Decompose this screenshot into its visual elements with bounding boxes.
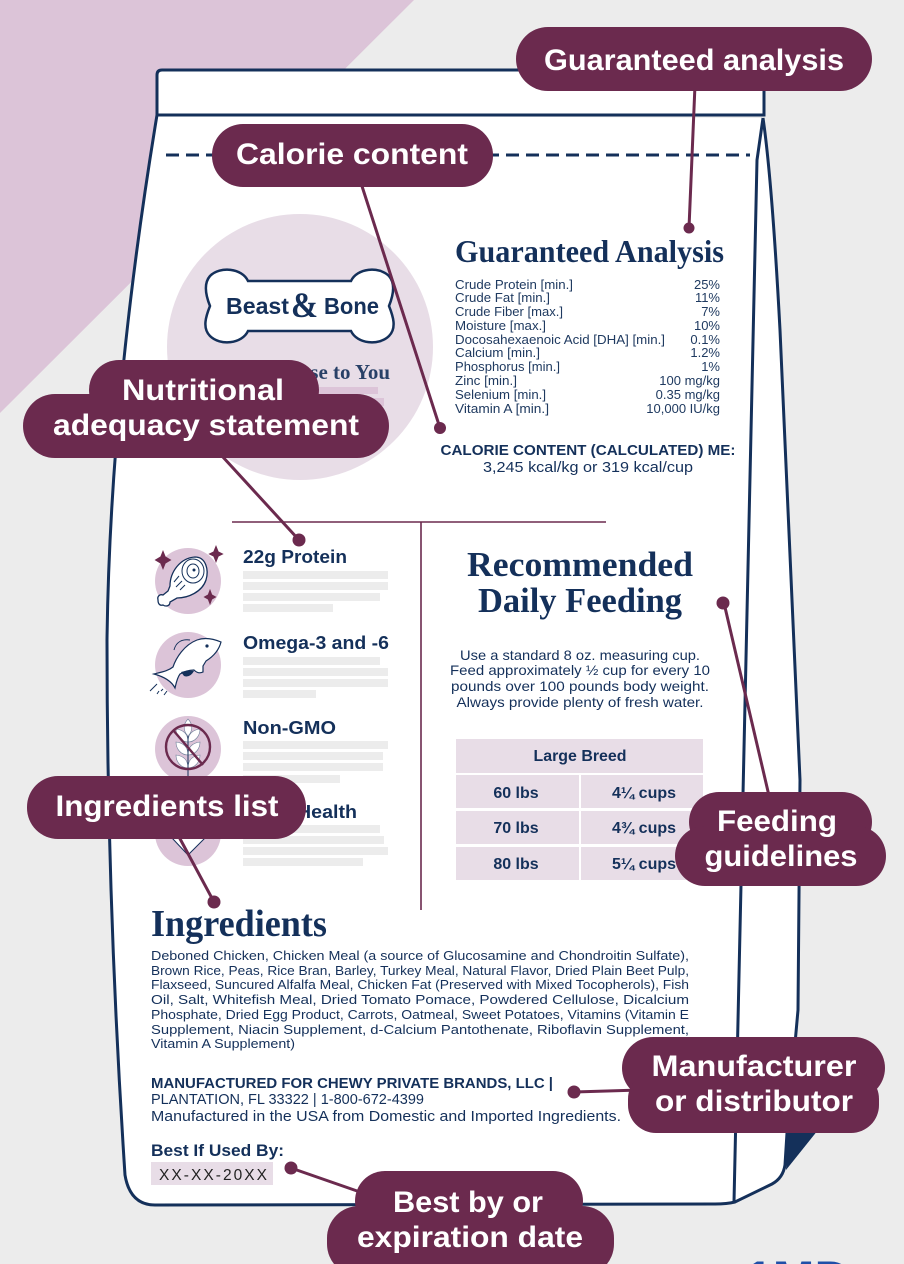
callout: manufacturer or distributor xyxy=(622,1037,885,1133)
icon: bone logo xyxy=(205,270,394,342)
callout: calorie content xyxy=(212,124,493,187)
benefit: health xyxy=(243,802,388,866)
callout: nutritional adequacy statement xyxy=(23,360,389,458)
feeding instructions: Use a standard 8 oz. measuring cup. xyxy=(460,647,700,663)
feeding instructions: Feed approximately ½ cup for every 10 xyxy=(450,662,710,678)
analysis table: Vitamin A [min.] xyxy=(455,401,549,416)
ingredients text xyxy=(151,948,689,1051)
benefit: protein xyxy=(243,547,388,612)
analysis table: 10% xyxy=(694,318,720,333)
analysis table: Docosahexaenoic Acid [DHA] [min.] xyxy=(455,332,665,347)
icon: meat xyxy=(155,547,222,614)
callout: guaranteed analysis: Guaranteed analysis xyxy=(544,44,844,77)
icon: heart health xyxy=(155,800,221,866)
callout: manufacturer or distributor: Manufacturer xyxy=(652,1050,857,1083)
heading: recommended daily feeding: Recommended xyxy=(467,545,694,584)
analysis table: Crude Protein [min.] xyxy=(455,277,573,292)
manufacturer text: PLANTATION, FL 33322 | 1-800-672-4399 xyxy=(151,1092,424,1108)
feeding table: 5¼ cups xyxy=(612,856,676,873)
ingredients text: Flaxseed, Suncured Alfalfa Meal, Chicken Fat (Preserved with Mixed Tocopherols), Fish xyxy=(151,977,689,992)
analysis table: Moisture [max.] xyxy=(455,318,546,333)
callout: best by or expiration date xyxy=(327,1171,614,1264)
analysis table: 1.2% xyxy=(690,345,720,360)
analysis table: Crude Fat [min.] xyxy=(455,290,550,305)
benefit: omega: Omega-3 and -6 xyxy=(243,633,389,653)
calorie content text: CALORIE CONTENT (CALCULATED) ME: xyxy=(440,443,736,459)
analysis table: Phosphorus [min.] xyxy=(455,359,560,374)
analysis table: 0.35 mg/kg xyxy=(656,387,720,402)
benefit: protein: 22g Protein xyxy=(243,547,347,567)
benefit: non-gmo xyxy=(243,718,388,783)
heading: recommended daily feeding: Daily Feeding xyxy=(478,581,682,620)
ingredients text: Oil, Salt, Whitefish Meal, Dried Tomato Pomace, Powdered Cellulose, Dicalcium xyxy=(151,992,689,1007)
analysis table: 10,000 IU/kg xyxy=(646,401,720,416)
heading: guaranteed analysis: Guaranteed Analysis xyxy=(455,234,724,269)
analysis table: 7% xyxy=(701,304,720,319)
best by date xyxy=(151,1142,284,1185)
callout: best by or expiration date: expiration date xyxy=(357,1221,583,1254)
analysis table xyxy=(455,277,720,416)
best by date: XX-XX-20XX xyxy=(159,1167,268,1184)
callout: manufacturer or distributor: or distributor xyxy=(655,1085,853,1118)
ingredients text: Phosphate, Dried Egg Product, Carrots, Oatmeal, Sweet Potatoes, Vitamins (Vitamin E xyxy=(151,1007,689,1022)
callout: best by or expiration date: Best by or xyxy=(393,1186,543,1219)
ingredients text: Deboned Chicken, Chicken Meal (a source of Glucosamine and Chondroitin Sulfate), xyxy=(151,948,689,963)
feeding table: 60 lbs xyxy=(493,785,539,802)
icon: no grain xyxy=(155,716,221,782)
calorie content text: 3,245 kcal/kg or 319 kcal/cup xyxy=(483,460,693,476)
ingredients text: Supplement, Niacin Supplement, d-Calcium Pantothenate, Riboflavin Supplement, xyxy=(151,1022,689,1037)
feeding table: 70 lbs xyxy=(493,820,539,837)
analysis table: Calcium [min.] xyxy=(455,345,540,360)
best by date: Best If Used By: xyxy=(151,1142,284,1160)
feeding table: 80 lbs xyxy=(493,856,539,873)
analysis table: 0.1% xyxy=(690,332,720,347)
analysis table: Selenium [min.] xyxy=(455,387,546,402)
ingredients panel xyxy=(151,903,689,1051)
feeding instructions: Always provide plenty of fresh water. xyxy=(456,694,704,710)
guaranteed analysis panel xyxy=(455,234,724,416)
callout: feeding guidelines: guidelines xyxy=(704,840,858,873)
analysis table: 100 mg/kg xyxy=(659,373,720,388)
analysis table: 11% xyxy=(695,290,720,305)
heading: ingredients: Ingredients xyxy=(151,903,327,945)
analysis table: 1% xyxy=(701,359,720,374)
leader lines and dots xyxy=(178,85,770,1192)
analysis table: Crude Fiber [max.] xyxy=(455,304,563,319)
callout: guaranteed analysis xyxy=(516,27,872,91)
callout: ingredients list xyxy=(27,776,306,839)
decorative background triangle xyxy=(0,0,414,413)
analysis table: 25% xyxy=(694,277,720,292)
callout: nutritional adequacy statement: Nutritional xyxy=(122,374,284,407)
heading: recommended daily feeding xyxy=(467,545,694,620)
icon: bone logo: Beast xyxy=(226,293,289,319)
benefit: non-gmo: Non-GMO xyxy=(243,718,336,738)
feeding panel xyxy=(450,545,710,880)
icon: fish xyxy=(150,632,221,698)
ingredients text: Vitamin A Supplement) xyxy=(151,1036,295,1051)
manufacturer text: MANUFACTURED FOR CHEWY PRIVATE BRANDS, LLC | xyxy=(151,1076,553,1092)
callout: nutritional adequacy statement: adequacy statement xyxy=(53,409,359,442)
tagline: Nose to You xyxy=(285,360,390,384)
divider lines xyxy=(232,522,606,910)
feeding instructions: pounds over 100 pounds body weight. xyxy=(451,678,709,694)
brand circle with logo xyxy=(167,214,433,480)
dog food bag outline xyxy=(107,70,818,1205)
callout: ingredients list: Ingredients list xyxy=(56,790,279,823)
manufacturer text xyxy=(151,1076,621,1125)
benefits list xyxy=(150,547,389,866)
analysis table: Zinc [min.] xyxy=(455,373,517,388)
feeding table: Large Breed xyxy=(534,748,626,765)
icon: bone logo: & xyxy=(291,285,318,325)
callout: calorie content: Calorie content xyxy=(236,138,468,171)
ingredients text: Brown Rice, Peas, Rice Bran, Barley, Turkey Meal, Natural Flavor, Dried Plain Beet Pulp, xyxy=(151,963,689,978)
feeding instructions xyxy=(450,647,710,710)
benefit: omega xyxy=(243,633,389,698)
feeding table: 4¾ cups xyxy=(612,820,676,837)
callout: feeding guidelines xyxy=(675,792,886,886)
feeding table: 4¼ cups xyxy=(612,785,676,802)
manufacturer text: Manufactured in the USA from Domestic and Imported Ingredients. xyxy=(151,1109,621,1125)
icon: bone logo: Bone xyxy=(324,293,379,319)
callout: feeding guidelines: Feeding xyxy=(717,805,837,838)
benefit: health: Health xyxy=(297,802,357,822)
feeding table xyxy=(456,739,703,880)
calorie content text xyxy=(440,443,736,476)
